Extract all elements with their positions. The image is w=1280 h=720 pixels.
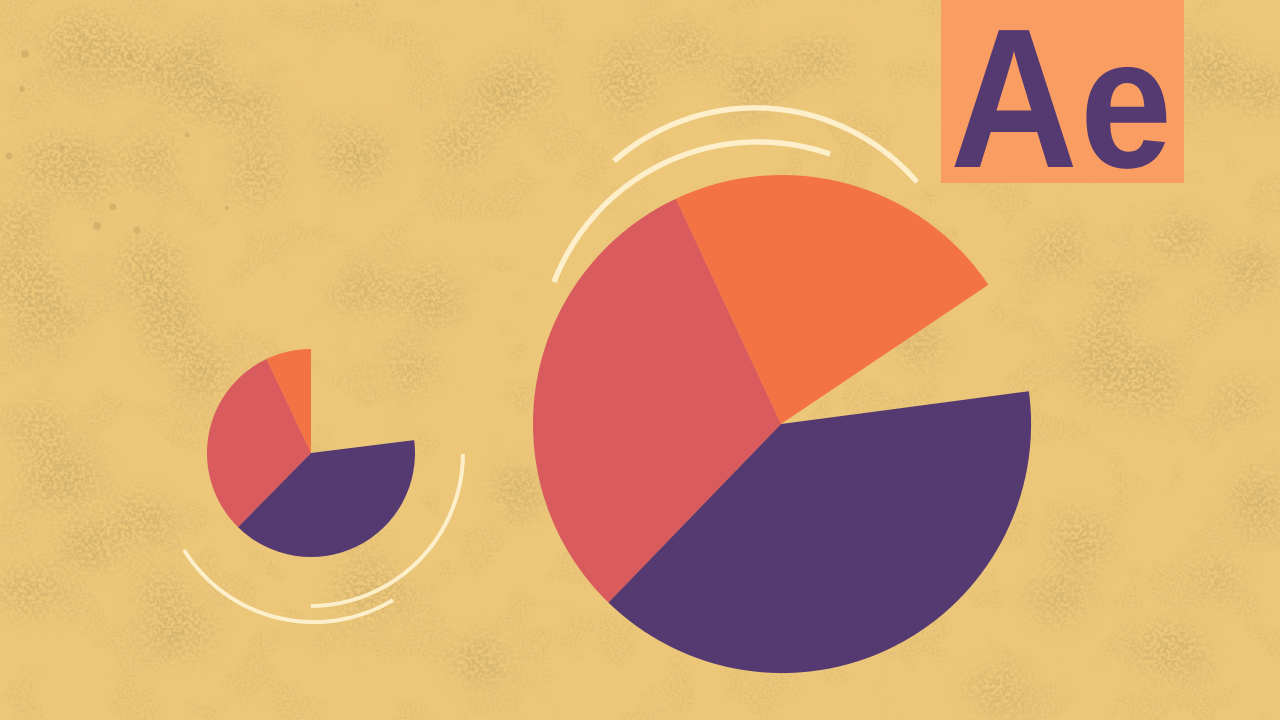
logo text: e — [1080, 0, 1172, 207]
logo badge — [941, 0, 1184, 209]
large pie outer arcs — [554, 108, 917, 282]
small pie: purple slice — [238, 440, 415, 557]
large pie chart — [533, 175, 1031, 673]
large pie: red slice — [533, 199, 781, 602]
small pie: red slice — [207, 359, 311, 527]
small pie chart — [207, 349, 415, 557]
large pie: orange slice — [676, 175, 988, 424]
small pie outer arcs — [184, 454, 463, 622]
large pie: purple slice — [608, 391, 1031, 673]
small pie: orange slice — [266, 349, 311, 453]
background specks — [6, 4, 358, 234]
